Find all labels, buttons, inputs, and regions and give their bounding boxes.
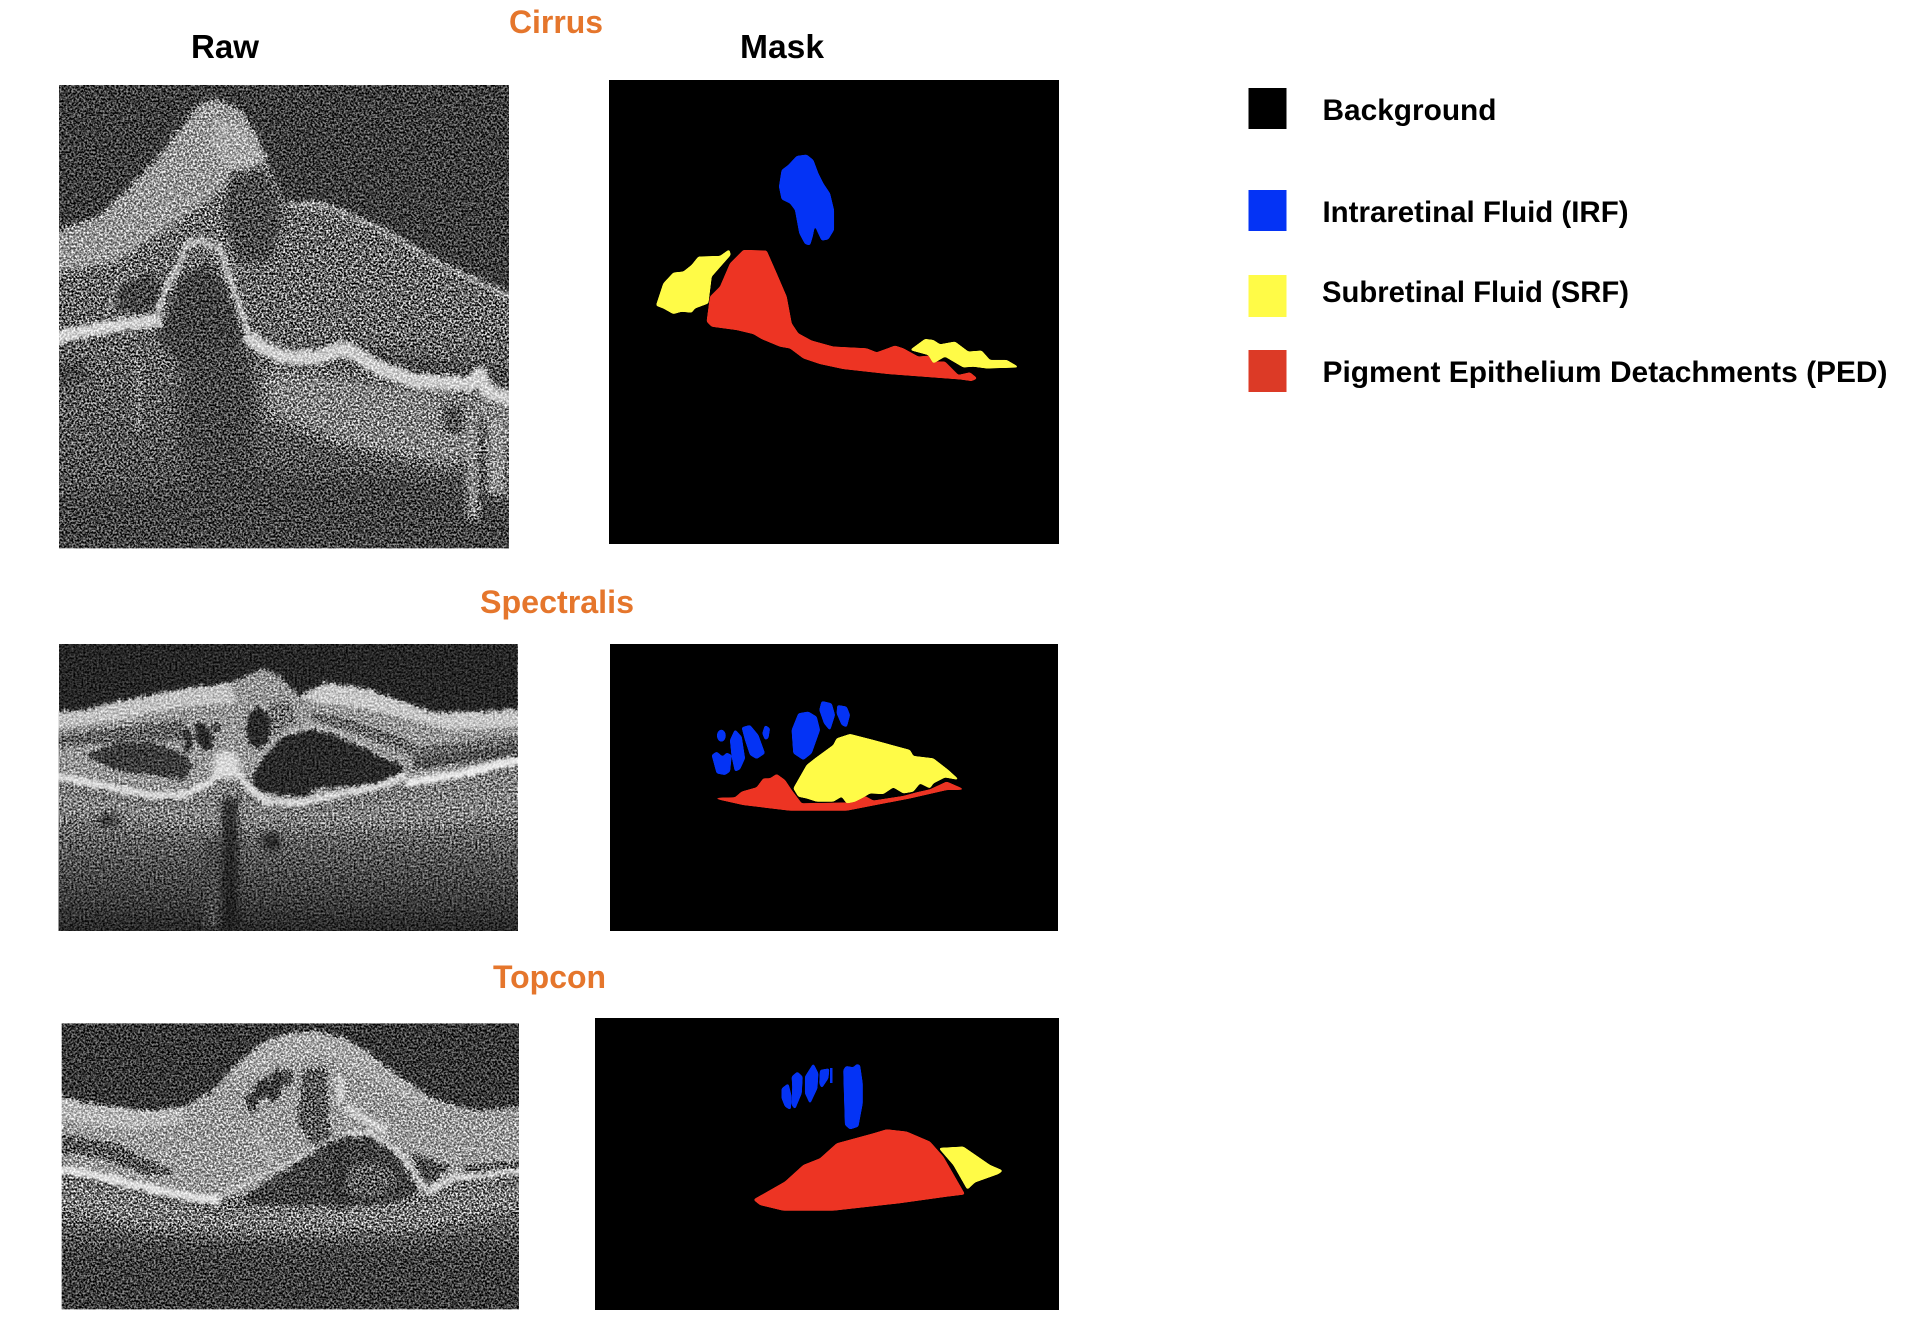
panel: Cirrus raw OCT scan (43, 85, 523, 562)
mask regions: Spectralis (712, 701, 965, 811)
mask regions: Cirrus (656, 155, 1019, 381)
legend item: Background (1248, 88, 1496, 129)
panel: Topcon segmentation mask (595, 1018, 1059, 1310)
legend (1248, 88, 1888, 392)
heading: Topcon: Topcon (493, 959, 606, 995)
panel: Spectralis segmentation mask (610, 644, 1058, 931)
legend item: Subretinal Fluid (1248, 275, 1629, 317)
column heading: Mask: Mask (740, 28, 825, 65)
panel: Spectralis raw OCT scan (58, 644, 518, 931)
heading: Spectralis: Spectralis (480, 584, 634, 620)
panel: Topcon raw OCT scan (62, 1023, 519, 1310)
panel: Cirrus segmentation mask (609, 80, 1059, 544)
heading: Cirrus: Cirrus (509, 4, 603, 40)
legend item: Intraretinal Fluid: Intraretinal Fluid (IRF) (1322, 196, 1628, 229)
column heading: Raw: Raw (191, 28, 259, 65)
legend item: Subretinal Fluid: Subretinal Fluid (SRF) (1322, 276, 1629, 309)
mask fragment: thin IRF sliver (830, 1068, 832, 1083)
legend item: Pigment Epithelium Detachments: Pigment Epithelium Detachments (PED) (1322, 356, 1888, 389)
legend item: Pigment Epithelium Detachments (1248, 350, 1888, 392)
legend item: Background: Background (1322, 94, 1496, 127)
mask regions: Topcon (753, 1063, 1003, 1211)
legend item: Intraretinal Fluid (1248, 190, 1628, 231)
